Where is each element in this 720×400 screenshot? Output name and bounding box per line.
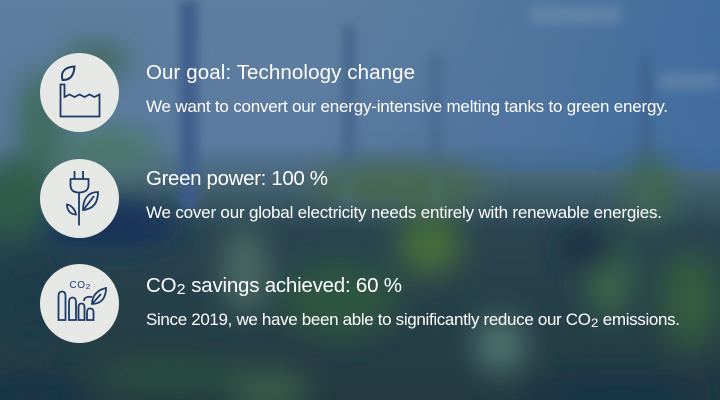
heading: green power: Green power: 100 % bbox=[146, 167, 328, 190]
text: CO2 description: Since 2019, we have been able to significantly reduce our CO₂ emissions. bbox=[146, 307, 680, 330]
label: CO2: CO₂ bbox=[70, 276, 90, 291]
heading: our goal: Our goal: Technology change bbox=[146, 61, 415, 84]
row: green power bbox=[40, 159, 662, 238]
text: goal description: We want to convert our energy-intensive melting tanks to green energy. bbox=[146, 97, 668, 116]
icon: CO2 bars with leaves bbox=[40, 264, 119, 343]
text: green power description: We cover our global electricity needs entirely with renewable energies. bbox=[146, 203, 662, 222]
heading: CO2 savings: CO₂ savings achieved: 60 % bbox=[146, 270, 402, 298]
icon: plug with leaves bbox=[40, 159, 119, 238]
row: CO2 savings bbox=[40, 264, 680, 343]
icon: factory with leaf bbox=[40, 53, 119, 132]
row: technology change bbox=[40, 53, 668, 132]
